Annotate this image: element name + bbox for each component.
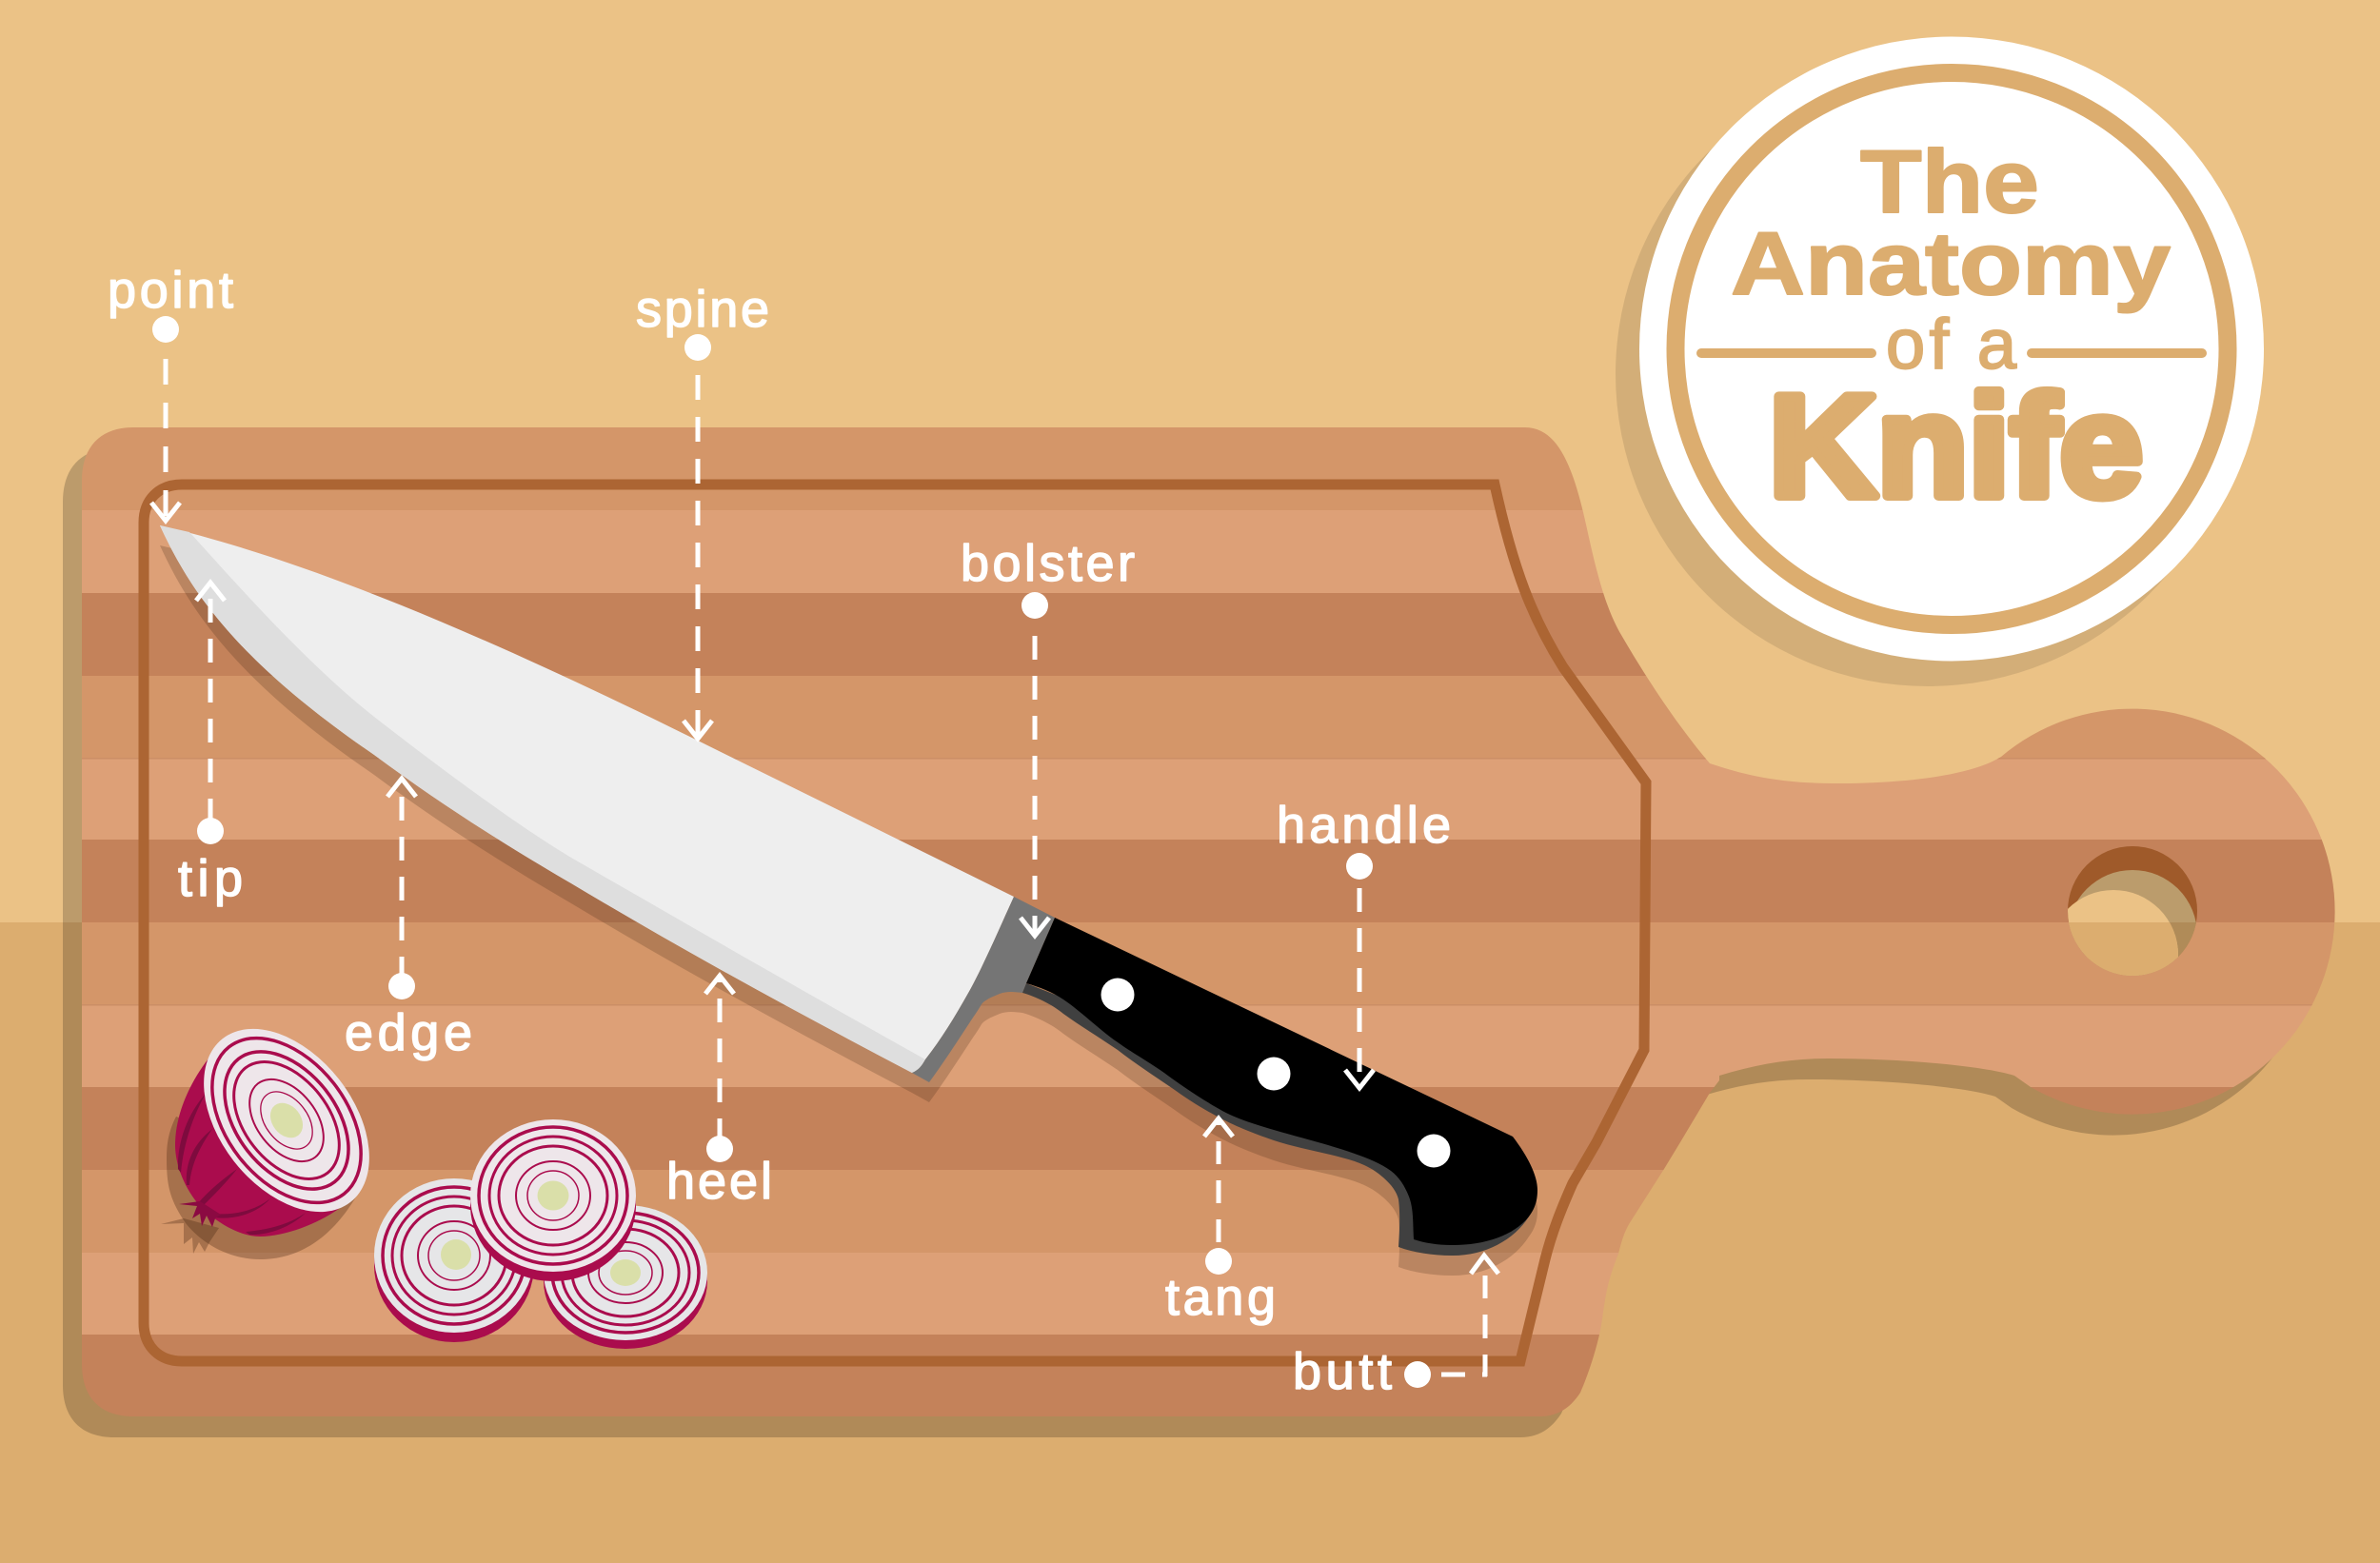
title: of a with rules bbox=[1696, 305, 2207, 384]
onion slice: right bbox=[544, 1205, 707, 1349]
callout: point bbox=[108, 262, 233, 521]
onion cut face bbox=[170, 998, 403, 1243]
onion body bbox=[175, 1054, 340, 1237]
knife shadow bbox=[160, 545, 1537, 1276]
callout: spine bbox=[636, 281, 769, 739]
bolster bbox=[912, 897, 1055, 1082]
callout: tip bbox=[178, 583, 243, 907]
board juice groove bbox=[144, 485, 1646, 1361]
title: Anatomy: Anatomy bbox=[1731, 213, 2171, 313]
title: of a with rules: of a bbox=[1886, 305, 2017, 384]
callout: handle bbox=[1277, 797, 1451, 1088]
callout: butt: butt bbox=[1293, 1343, 1392, 1400]
badge ring bbox=[1676, 72, 2228, 624]
onion root bbox=[179, 1201, 221, 1227]
callout: bolster bbox=[961, 535, 1135, 936]
knife bbox=[160, 525, 1537, 1256]
tang bbox=[1022, 983, 1529, 1256]
callout: handle: handle bbox=[1277, 797, 1451, 854]
callout: tang bbox=[1165, 1118, 1276, 1326]
title: The: The bbox=[1860, 131, 2039, 231]
title badge bbox=[1616, 36, 2264, 686]
callout: heel bbox=[666, 976, 772, 1210]
cutting board with wood stripes bbox=[76, 427, 2361, 1420]
board hanging hole bbox=[2068, 846, 2197, 976]
blade edge bevel bbox=[160, 525, 925, 1073]
callout: edge bbox=[345, 779, 472, 1061]
cutting board shadow bbox=[63, 448, 2316, 1437]
knife blade bbox=[160, 525, 1014, 1073]
rivets bbox=[1101, 979, 1451, 1167]
title: Knife: Knife bbox=[1769, 366, 2143, 527]
callout: bolster: bolster bbox=[961, 535, 1135, 592]
onion shadow bbox=[161, 1117, 364, 1259]
badge shadow bbox=[1616, 62, 2240, 686]
handle bbox=[1026, 918, 1537, 1245]
callout: tip: tip bbox=[178, 850, 243, 907]
callout: spine: spine bbox=[636, 281, 769, 338]
onion slice: top bbox=[470, 1119, 636, 1281]
callout: butt bbox=[1293, 1256, 1498, 1400]
badge disc bbox=[1639, 36, 2264, 661]
callout: tang: tang bbox=[1165, 1269, 1276, 1326]
onion skin veins bbox=[178, 1094, 306, 1235]
onion slice: left bbox=[374, 1178, 534, 1342]
callout: edge: edge bbox=[345, 1004, 472, 1061]
callout: heel: heel bbox=[666, 1153, 772, 1210]
half red onion bbox=[161, 998, 403, 1259]
callout: point: point bbox=[108, 262, 233, 319]
